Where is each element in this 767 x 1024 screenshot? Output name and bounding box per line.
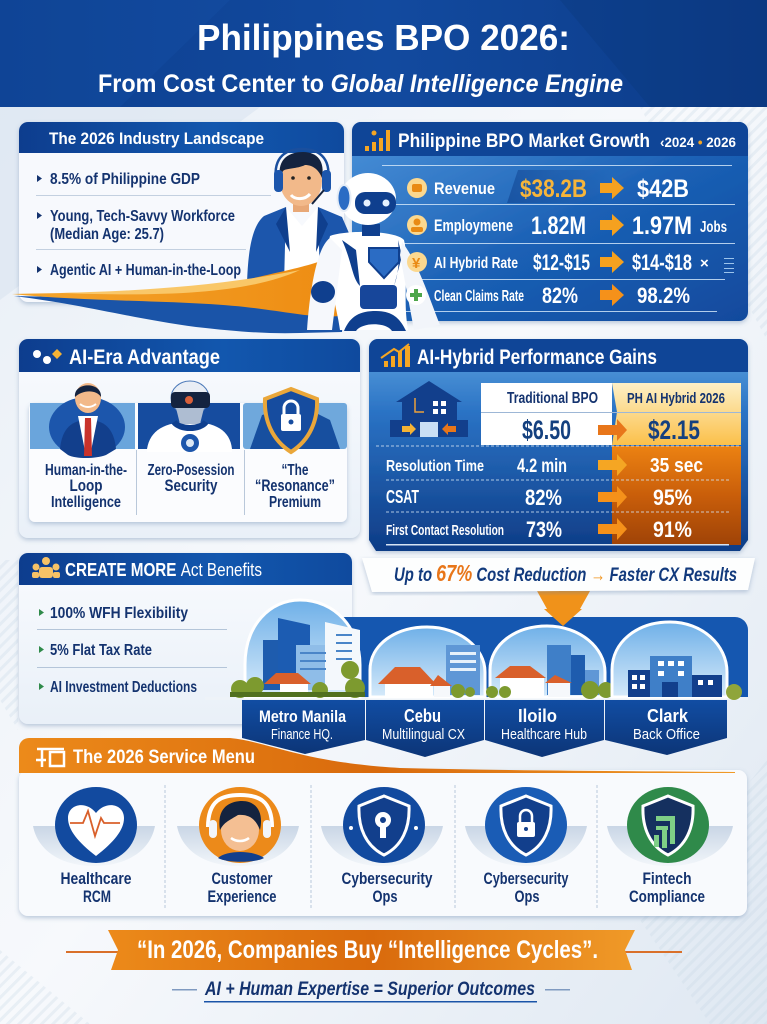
service: cybersecurity ops 2 bbox=[465, 787, 587, 906]
quote ribbon bbox=[66, 930, 682, 970]
row: first contact resolution: 91% bbox=[653, 517, 692, 542]
icon: clean claims bbox=[406, 285, 426, 305]
orange column bbox=[612, 446, 741, 545]
swoosh bbox=[12, 250, 345, 333]
label: Clark: Back Office bbox=[633, 726, 700, 743]
row: employment: Jobs bbox=[700, 219, 727, 236]
service: fintech compliance: Fintech bbox=[642, 869, 692, 888]
city: Cebu bbox=[370, 627, 485, 698]
torso bbox=[328, 232, 408, 330]
row: CSAT: 95% bbox=[653, 485, 692, 510]
icon: chart bbox=[381, 344, 410, 367]
row: clean claims: Clean Claims Rate bbox=[434, 288, 524, 305]
head bbox=[293, 194, 309, 212]
heading: market growth: Philippine BPO Market Growth bbox=[398, 131, 650, 152]
tagline: AI + Human Expertise = Superior Outcomes bbox=[204, 979, 535, 1000]
row: revenue: Revenue bbox=[434, 179, 495, 198]
arrow: callout pointer bbox=[537, 591, 590, 626]
bullet list: landscape bbox=[36, 171, 271, 279]
caption: Human-in-the- bbox=[45, 462, 127, 479]
label: Cebu bbox=[382, 706, 465, 743]
bullet list: benefits: AI Investment Deductions bbox=[50, 679, 197, 696]
caption: Security bbox=[164, 476, 218, 495]
quote ribbon: “In 2026, Companies Buy “Intelligence Cycles”. bbox=[137, 936, 598, 964]
label: Metro Manila: Finance HQ. bbox=[271, 726, 333, 743]
row: CSAT bbox=[386, 485, 692, 510]
row: revenue: $42B bbox=[637, 175, 689, 203]
bullet list: benefits: 5% Flat Tax Rate bbox=[50, 642, 152, 659]
label: Metro Manila: Metro Manila bbox=[259, 707, 346, 726]
row: employment: 1.82M bbox=[531, 212, 586, 240]
row: employment bbox=[434, 212, 727, 240]
caption: Zero-Posession bbox=[148, 462, 234, 479]
row: resolution time: 4.2 min bbox=[517, 456, 567, 477]
header banner bbox=[0, 0, 767, 107]
caption: Loop bbox=[70, 476, 102, 495]
comparison table: PH AI Hybrid 2026 bbox=[627, 390, 725, 407]
blazer bbox=[247, 207, 352, 285]
row: CSAT: 82% bbox=[525, 485, 562, 510]
heading: performance: AI-Hybrid Performance Gains bbox=[417, 346, 657, 369]
label: Clark: Clark bbox=[647, 706, 689, 726]
label: Iloilo: Iloilo bbox=[518, 706, 557, 726]
heading: advantage: AI-Era Advantage bbox=[69, 346, 220, 369]
row: AI hybrid rate bbox=[434, 250, 734, 275]
market row icons bbox=[406, 178, 427, 305]
icon: employment bbox=[407, 215, 427, 235]
comparison table: $2.15 bbox=[648, 415, 700, 445]
caption bbox=[255, 462, 335, 511]
icon: hybrid rate: ¥ bbox=[412, 255, 421, 272]
inner card bbox=[29, 403, 347, 522]
caption: “Resonance” bbox=[255, 476, 335, 495]
row: AI hybrid rate: × bbox=[700, 255, 709, 272]
icon: menu grid bbox=[36, 749, 64, 767]
illustration: robot bbox=[307, 173, 440, 331]
icon: growth bars bbox=[365, 130, 390, 151]
row: employment: 1.97M bbox=[632, 212, 692, 240]
right arm bbox=[400, 242, 440, 330]
service: cybersecurity ops 1: Ops bbox=[372, 887, 398, 906]
subtitle: From Cost Center to Global Intelligence Engine bbox=[98, 70, 623, 98]
caption bbox=[148, 462, 234, 495]
callout: cost reduction bbox=[362, 558, 755, 592]
service: customer experience: Experience bbox=[208, 887, 276, 906]
label: Cebu: Multilingual CX bbox=[382, 726, 465, 743]
label: Iloilo bbox=[501, 706, 587, 743]
label: Metro Manila bbox=[259, 707, 346, 743]
panel: service menu bbox=[19, 738, 747, 916]
bullet list: benefits bbox=[37, 605, 227, 696]
label: Cebu: Cebu bbox=[404, 706, 441, 726]
card: human-in-the-loop bbox=[30, 383, 135, 511]
label: Iloilo: Healthcare Hub bbox=[501, 726, 587, 743]
row: clean claims: 98.2% bbox=[637, 283, 690, 308]
city band bbox=[205, 591, 748, 700]
illustration: human agent bbox=[247, 149, 352, 285]
callout: cost reduction: Up to 67% Cost Reduction → Faster CX Results bbox=[394, 560, 737, 586]
row: first contact resolution: First Contact Resolution bbox=[386, 522, 504, 539]
row: AI hybrid rate: $12-$15 bbox=[533, 250, 590, 275]
row: CSAT: CSAT bbox=[386, 487, 419, 507]
row: revenue bbox=[434, 170, 689, 203]
panel: industry landscape bbox=[19, 122, 344, 302]
heading: benefits: CREATE MORE Act Benefits bbox=[65, 560, 262, 580]
service: cybersecurity ops 2: Cybersecurity bbox=[484, 869, 569, 888]
comparison table: Traditional BPO bbox=[507, 390, 598, 407]
panel: AI-era advantage bbox=[19, 339, 360, 538]
bullet list: landscape: Young, Tech-Savvy Workforce bbox=[50, 208, 235, 225]
row: first contact resolution bbox=[386, 517, 692, 542]
comparison table bbox=[481, 383, 741, 445]
heading: landscape: The 2026 Industry Landscape bbox=[49, 129, 264, 148]
comparison table: $6.50 bbox=[522, 415, 571, 445]
service: fintech compliance bbox=[607, 787, 733, 906]
bullet list: landscape: Agentic AI + Human-in-the-Loop bbox=[50, 262, 241, 279]
icon: revenue bbox=[407, 178, 427, 198]
location labels bbox=[242, 700, 727, 757]
bullet list: landscape: 8.5% of Philippine GDP bbox=[50, 171, 200, 188]
panel: performance gains bbox=[369, 339, 748, 551]
row: resolution time: Resolution Time bbox=[386, 458, 484, 475]
icon: dots bbox=[33, 349, 62, 364]
bullet list: landscape: (Median Age: 25.7) bbox=[50, 226, 164, 243]
service: healthcare RCM bbox=[33, 787, 155, 906]
card: zero-possession bbox=[138, 381, 240, 495]
year range: ‹2024 • 2026 bbox=[660, 134, 736, 150]
heading: service menu: The 2026 Service Menu bbox=[73, 747, 255, 768]
row: AI hybrid rate: $14-$18 bbox=[632, 250, 692, 275]
row: first contact resolution: 73% bbox=[526, 517, 562, 542]
caption: Intelligence bbox=[51, 494, 121, 511]
caption: Premium bbox=[269, 494, 321, 511]
title: Philippines BPO 2026: bbox=[197, 17, 570, 58]
service: cybersecurity ops 1: Cybersecurity bbox=[342, 869, 433, 888]
row: AI hybrid rate: AI Hybrid Rate bbox=[434, 255, 518, 272]
service: healthcare RCM: Healthcare bbox=[60, 869, 132, 888]
label: Clark bbox=[633, 706, 700, 743]
caption bbox=[45, 462, 127, 511]
service: healthcare RCM: RCM bbox=[83, 887, 111, 906]
left arm bbox=[307, 238, 342, 330]
card: resonance premium bbox=[243, 389, 347, 511]
service: fintech compliance: Compliance bbox=[629, 887, 705, 906]
service: cybersecurity ops 1 bbox=[321, 787, 443, 906]
row: revenue: $38.2B bbox=[520, 175, 587, 203]
bullet list: benefits: 100% WFH Flexibility bbox=[50, 605, 188, 622]
row: resolution time: 35 sec bbox=[650, 455, 703, 477]
service: customer experience: Customer bbox=[212, 869, 273, 888]
service: customer experience bbox=[177, 787, 299, 906]
panel: CREATE MORE benefits bbox=[19, 553, 352, 724]
city: Clark bbox=[612, 622, 742, 700]
row: resolution time bbox=[386, 454, 703, 477]
city: Iloilo bbox=[486, 626, 614, 699]
icon: team bbox=[32, 557, 60, 578]
caption: “The bbox=[282, 462, 309, 479]
row: clean claims: 82% bbox=[542, 283, 578, 308]
city: Metro Manila bbox=[230, 600, 365, 698]
service: cybersecurity ops 2: Ops bbox=[514, 887, 540, 906]
row: employment: Employmene bbox=[434, 216, 513, 235]
row: clean claims bbox=[434, 283, 690, 308]
panel: market growth bbox=[352, 122, 748, 321]
icon: office building bbox=[390, 381, 468, 437]
